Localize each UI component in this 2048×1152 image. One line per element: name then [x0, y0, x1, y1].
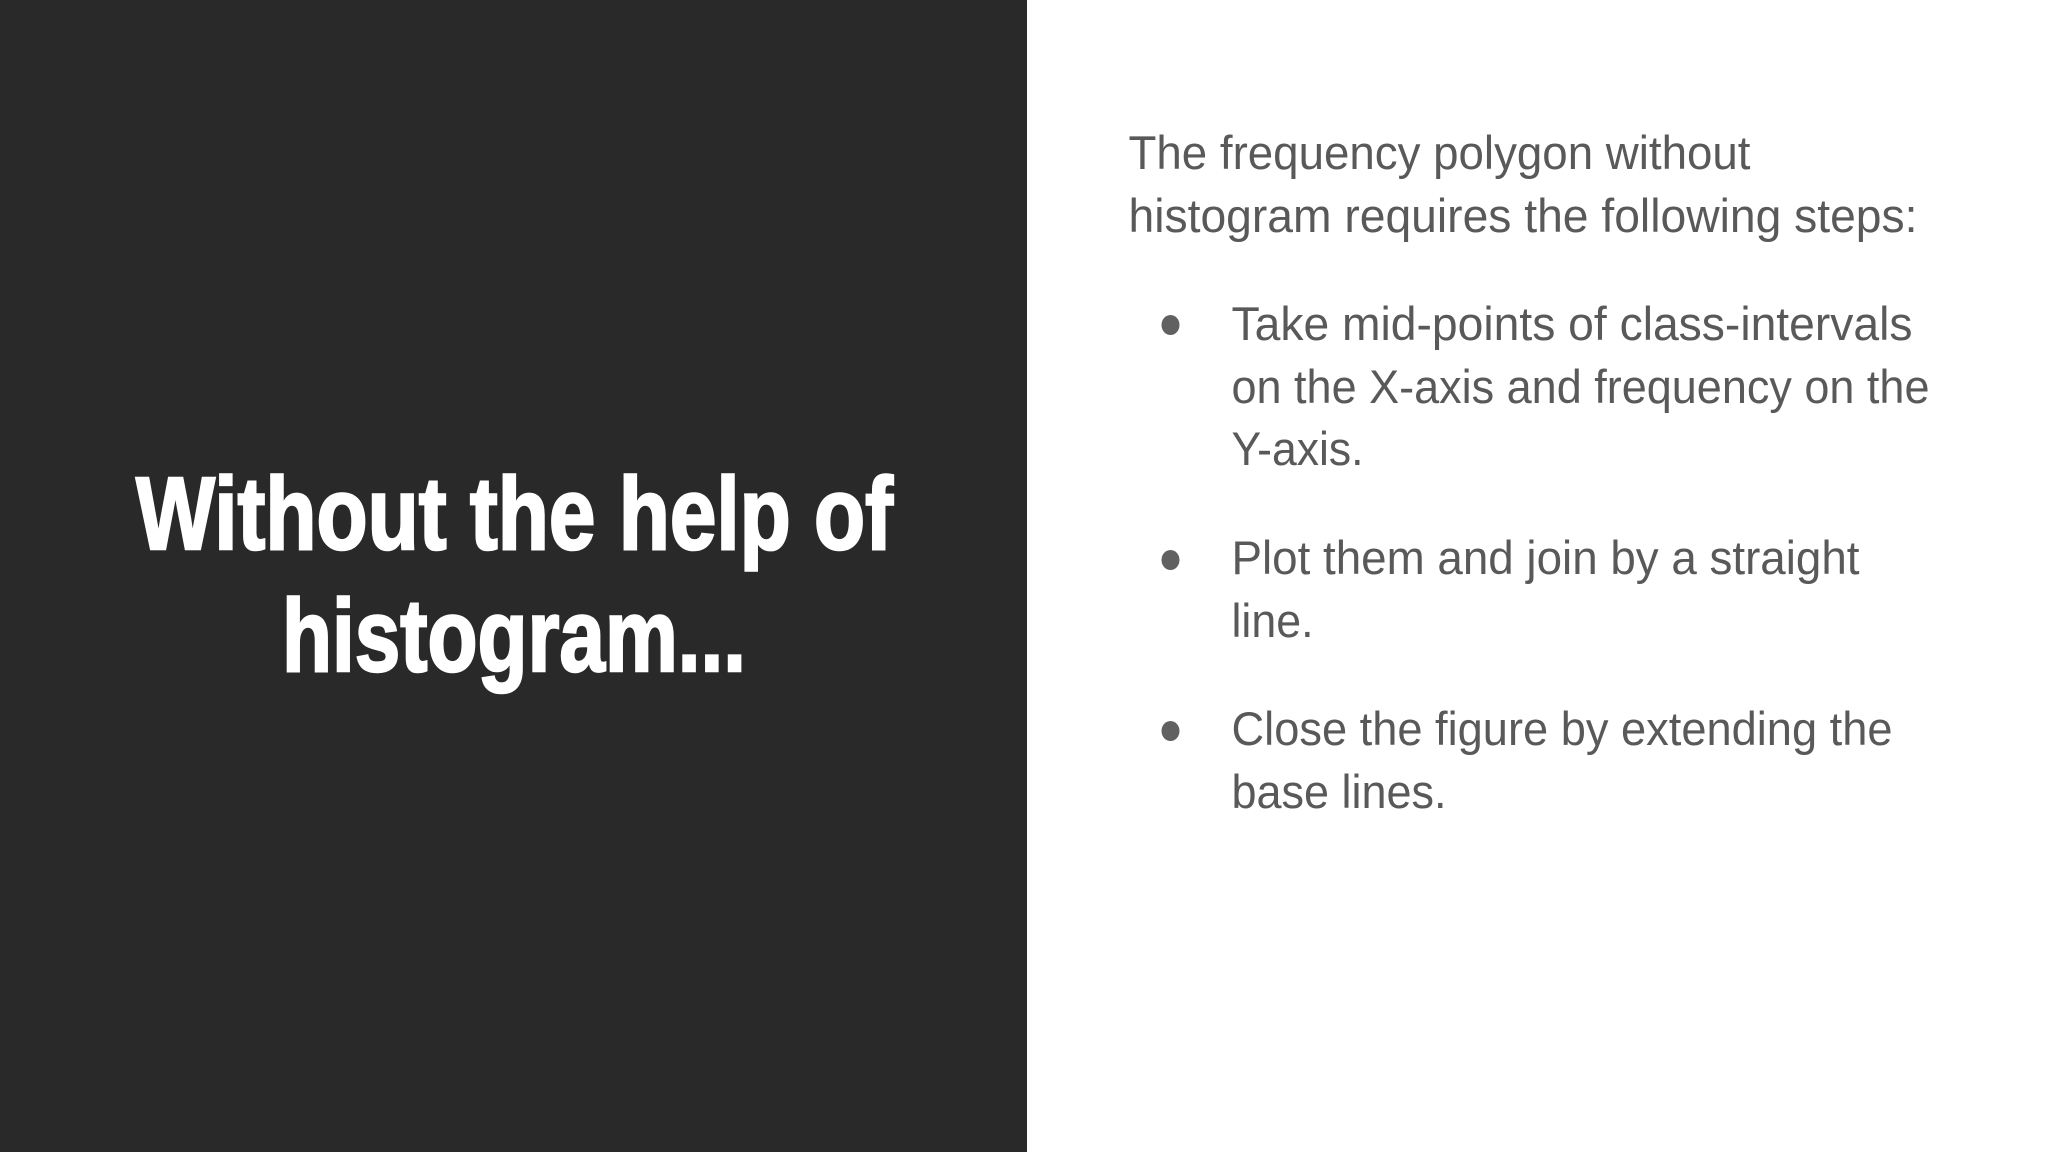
step 1: on the X-axis and frequency on the [1232, 361, 1930, 414]
step 1: Y-axis. [1232, 423, 1364, 476]
step 1: Take mid-points of class-intervals [1232, 298, 1912, 351]
panel: left dark panel [0, 0, 1027, 1152]
title: Without the help of [136, 456, 894, 571]
background: right white panel [1027, 0, 2048, 1152]
bullet list: steps [1162, 298, 1930, 819]
step 2: Plot them and join by a straight [1232, 532, 1860, 585]
title [136, 456, 894, 693]
step 3: base lines. [1232, 766, 1446, 819]
title: histogram... [282, 578, 746, 693]
step 1 [1162, 298, 1930, 476]
step 2: line. [1232, 595, 1314, 648]
step 3 [1162, 703, 1892, 819]
step 2 [1162, 532, 1860, 648]
step 3: Close the figure by extending the [1232, 703, 1892, 756]
text block: introduction [1128, 127, 1918, 243]
text block: introduction: The frequency polygon without [1128, 127, 1750, 180]
text block: introduction: histogram requires the following steps: [1128, 190, 1918, 243]
